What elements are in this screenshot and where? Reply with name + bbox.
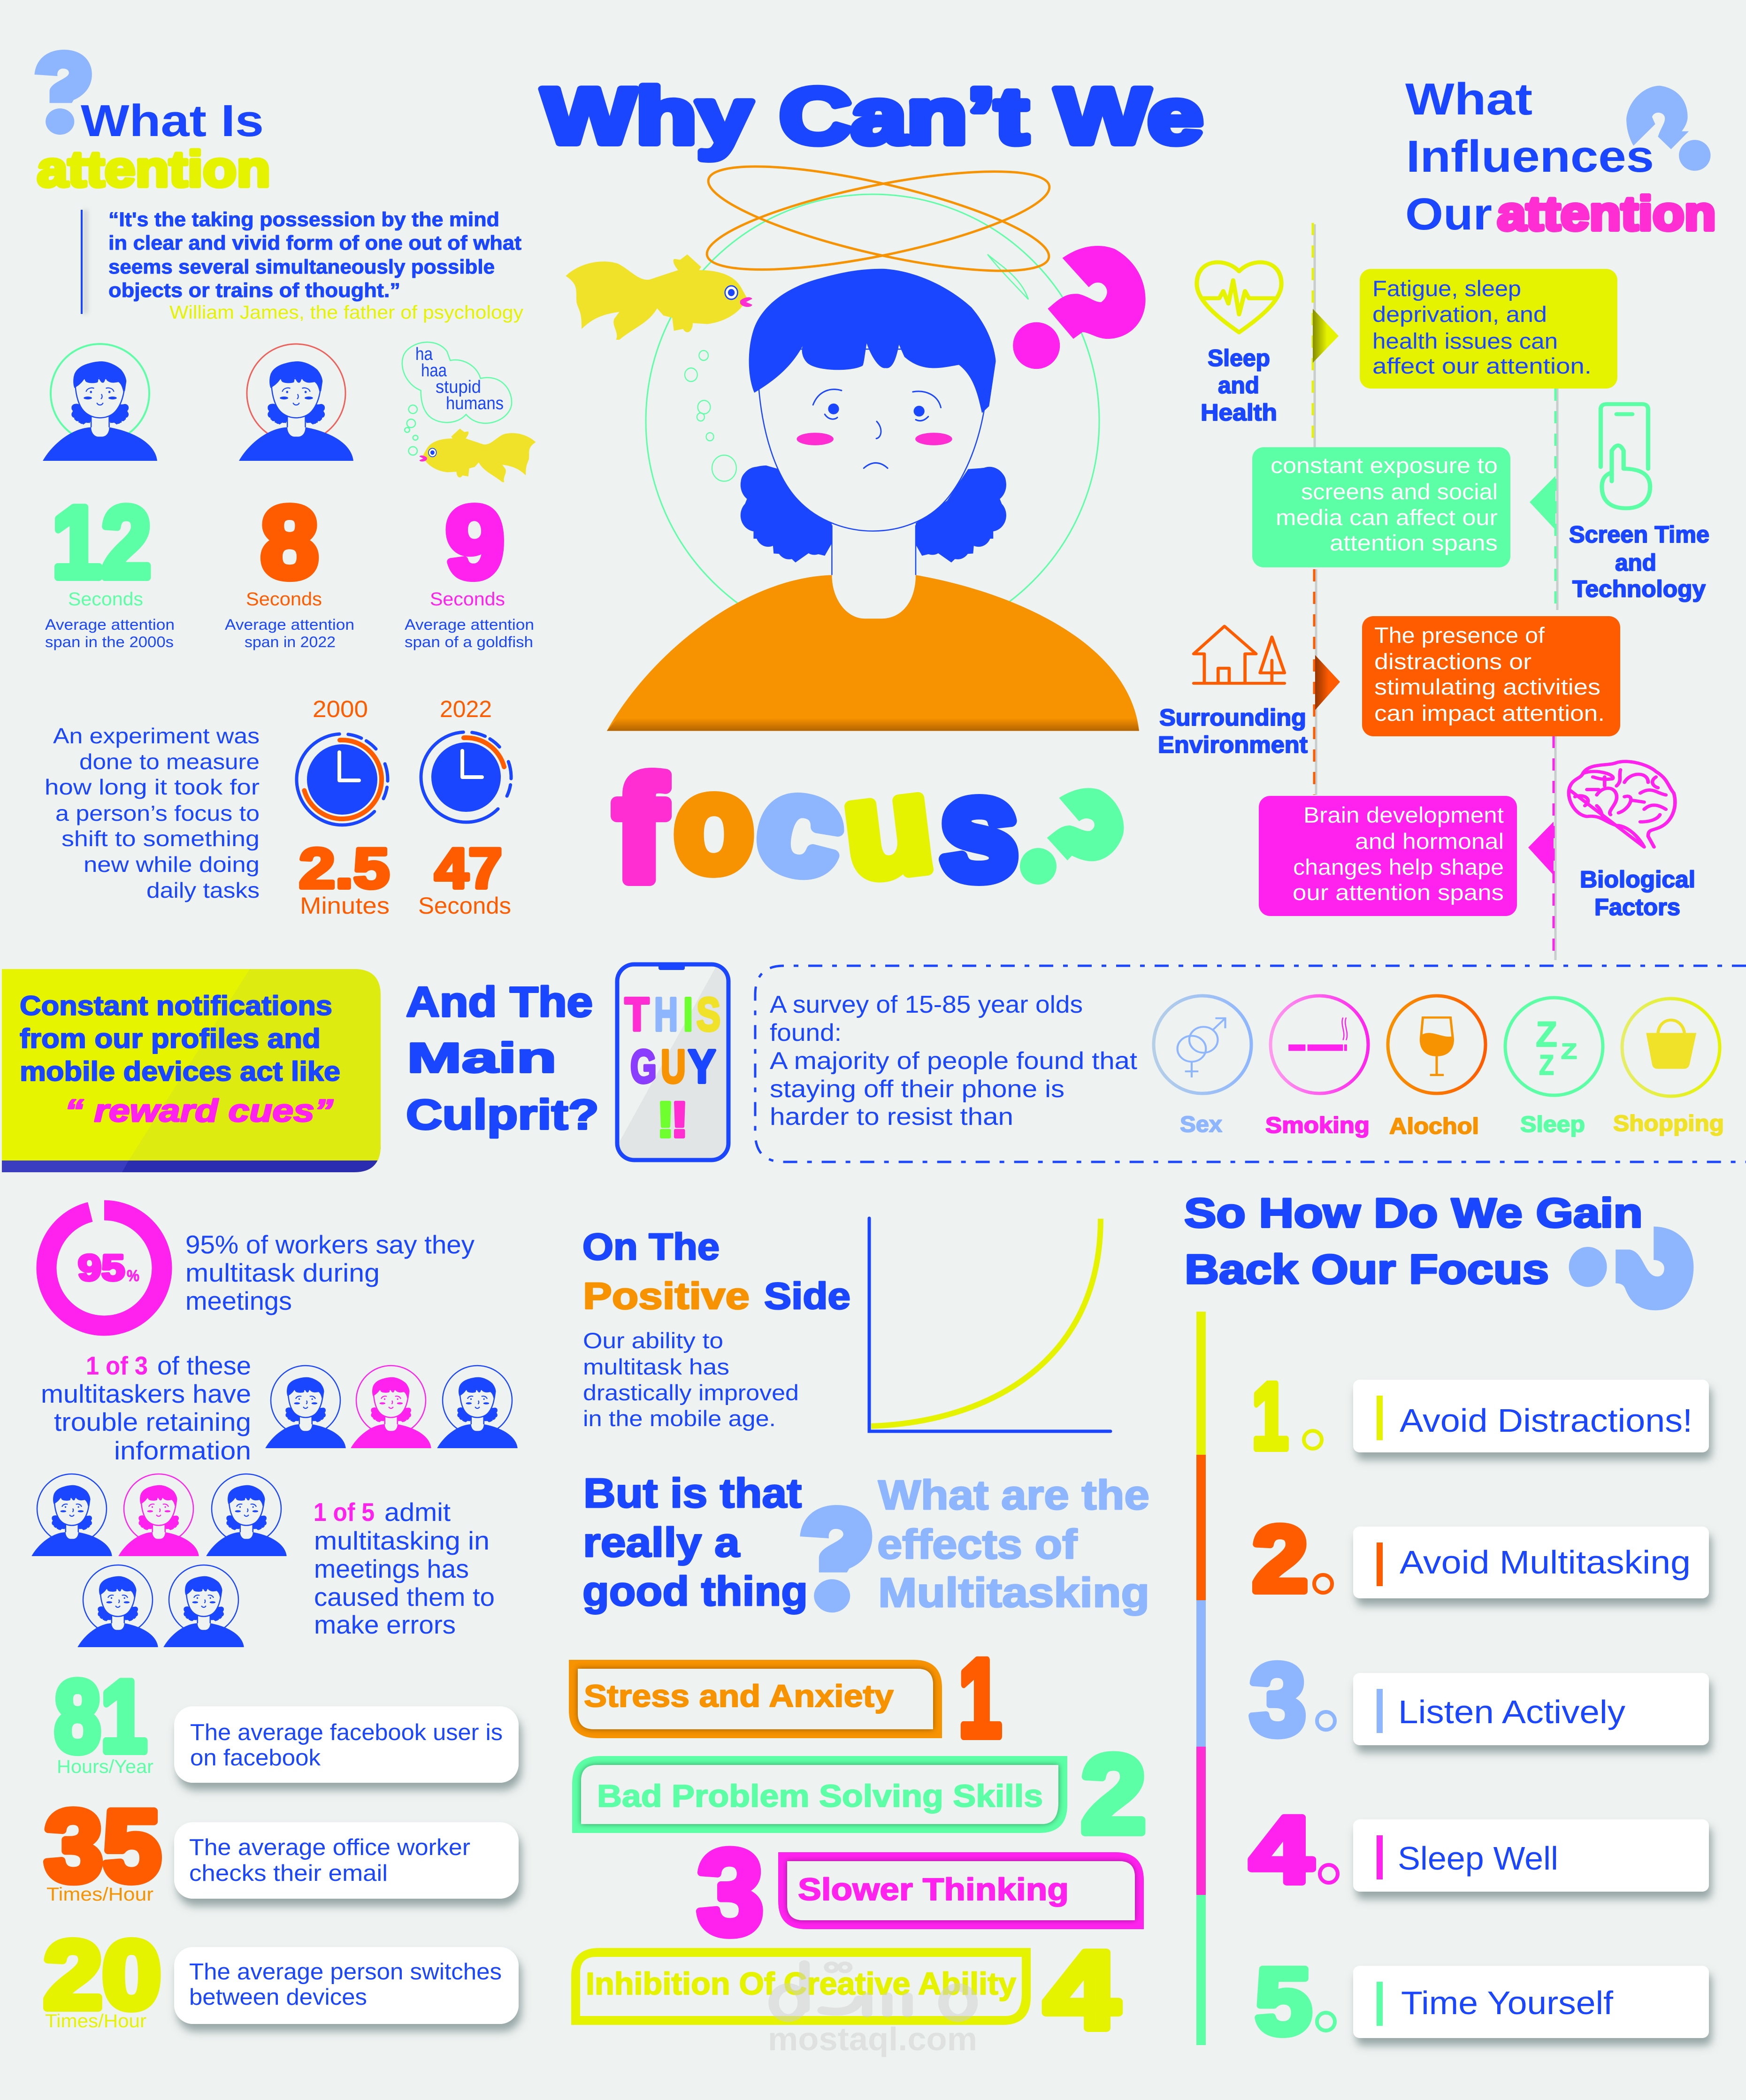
effect 4: 4 [1044, 1928, 1119, 2052]
callout: surrounding environment: distractions or [1374, 649, 1532, 674]
experiment text: new while doing [84, 852, 260, 877]
step 4: 4 [1250, 1797, 1313, 1902]
quote text [108, 208, 521, 302]
stat: 12 seconds: Average attention [45, 616, 175, 633]
label: biological factors: Factors [1594, 894, 1680, 920]
people: 1 of 5 [31, 1474, 287, 1647]
heading: but is that really a good thing: But is that [583, 1470, 802, 1516]
step 3 [1249, 1643, 1709, 1757]
callout: sleep and health: deprivation, and [1372, 302, 1547, 327]
heading: Positive [583, 1275, 750, 1317]
goldfish thought bubble: haa [421, 361, 447, 381]
stat: 2.5 minutes: 2.5 [299, 836, 390, 900]
heading: Our [1405, 189, 1492, 239]
text: drastically improved [583, 1380, 799, 1405]
icon: smoking [1265, 996, 1370, 1138]
stat: 12 seconds [45, 485, 175, 650]
this [625, 988, 720, 1041]
heading: focus [614, 742, 1124, 911]
callout: sleep and health [1313, 269, 1617, 389]
label: sleep and health: Sleep [1208, 345, 1270, 371]
text: 1 of 5 [314, 1497, 495, 1639]
icon: heart [1197, 262, 1281, 332]
experiment text: a person’s focus to [55, 801, 260, 825]
quote text: objects or trains of thought.” [108, 279, 400, 302]
quote text: in clear and vivid form of one out of what [108, 232, 521, 254]
icon: magenta question mark [1013, 246, 1146, 369]
heading: and the main culprit: Main [407, 1035, 557, 1082]
icon: phone touch [1600, 404, 1650, 508]
donut: 95 percent: % [127, 1267, 139, 1285]
donut: 95 percent: 95 [78, 1247, 125, 1288]
stat: 81 hours per year [54, 1659, 519, 1783]
stat: 20 times per hour: The average person switches [189, 1959, 502, 1985]
label: surrounding environment: Surrounding [1159, 704, 1306, 731]
this: S [697, 988, 720, 1041]
effect 2: Bad Problem Solving Skills [597, 1779, 1043, 1814]
label: screen time and technology [1569, 521, 1709, 602]
effect 4 [571, 1928, 1119, 2052]
callout: biological factors: Brain development [1303, 802, 1504, 827]
callout: biological factors: our attention spans [1293, 880, 1504, 905]
effect 4: Inhibition Of Creative Ability [586, 1966, 1016, 2001]
icon: goldfish small [420, 428, 536, 482]
step 5: 5 [1255, 1948, 1312, 2054]
heading: focus: u [836, 746, 940, 908]
icon: question mark [800, 1505, 872, 1612]
icon: smoking: Smoking [1265, 1113, 1370, 1138]
icon: sleep: Z [1539, 1049, 1554, 1081]
panel: notifications callout: from our profiles and [20, 1023, 321, 1054]
person: 2000s [43, 344, 157, 461]
watermark text: mostaql.com [768, 2021, 977, 2057]
face details [796, 389, 952, 468]
heading: effects of multitasking: Multitasking [878, 1569, 1149, 1616]
panel: notifications callout: “ reward cues” [65, 1093, 333, 1129]
heading: and the main culprit: Culprit? [406, 1092, 599, 1138]
experiment text: how long it took for [45, 775, 260, 799]
stat: 2.5 minutes [299, 836, 390, 919]
heading: and the main culprit [406, 979, 599, 1138]
label: sleep and health: and [1218, 372, 1259, 398]
step 3: 3 [1249, 1643, 1306, 1757]
year labels: 2000 [313, 696, 368, 722]
icon: alcohol [1388, 996, 1486, 1139]
panel: usage stats [44, 1659, 519, 2031]
callout: surrounding environment: The presence of [1374, 623, 1545, 648]
donut: 95 percent [46, 1210, 162, 1326]
icon: sleep: Z [1536, 1015, 1557, 1054]
stat: 12 seconds: Seconds [68, 589, 143, 610]
heading: Back Our Focus [1185, 1246, 1549, 1292]
panel: what is attention [34, 50, 523, 323]
text: 95 percent: meetings [185, 1286, 292, 1315]
icon: rotated question mark [1569, 1227, 1693, 1310]
person: 2022 [239, 344, 353, 461]
panel: effects list [569, 1636, 1146, 2052]
icon: sleep: Z [1561, 1039, 1577, 1063]
step 2 [1252, 1507, 1709, 1611]
text: 1 of 5: meetings has [314, 1554, 469, 1583]
bubbles [685, 351, 736, 481]
heading: What [1405, 74, 1532, 124]
step 1: Avoid Distractions! [1400, 1402, 1692, 1439]
orbit rings [700, 145, 1057, 292]
stat: 2.5 minutes: Minutes [300, 893, 390, 919]
text: 1 of 5: caused them to [314, 1582, 495, 1611]
stat: 20 times per hour: 20 [44, 1921, 161, 2029]
heading: Side [764, 1275, 850, 1317]
label: screen time and technology: and [1615, 550, 1656, 576]
step 2: Avoid Multitasking [1400, 1544, 1691, 1581]
text: 95 percent [185, 1230, 475, 1315]
experiment text: done to measure [79, 749, 260, 774]
year labels [313, 696, 492, 722]
callout: surrounding environment: can impact attention. [1374, 701, 1605, 725]
label: biological factors: Biological [1580, 866, 1695, 893]
icon: shopping bag: Shopping [1613, 1111, 1724, 1136]
stat: 35 times per hour: 35 [45, 1789, 161, 1902]
callout: sleep and health: Fatigue, sleep [1372, 276, 1521, 301]
step 5 [1255, 1948, 1709, 2054]
survey text: A majority of people found that [770, 1047, 1138, 1075]
text: 1 of 5: make errors [314, 1610, 456, 1639]
stat: 20 times per hour [44, 1921, 519, 2031]
text: 1 of 3: trouble retaining [54, 1407, 251, 1436]
text: 1 of 5: 1 of 5 [314, 1497, 375, 1527]
guy: G [630, 1040, 657, 1093]
stat: 47 seconds [418, 836, 511, 919]
label: screen time and technology: Technology [1572, 576, 1706, 602]
text: 1 of 3: 1 of 3 [86, 1351, 148, 1380]
stat: 9 seconds: span of a goldfish [405, 634, 533, 650]
year labels: 2022 [440, 696, 492, 722]
panel: survey [755, 966, 1746, 1162]
icon: mint dot and question mark [1020, 788, 1124, 885]
stat: 35 times per hour [45, 1789, 519, 1905]
heading: So How Do We Gain [1184, 1190, 1643, 1236]
text [583, 1328, 799, 1431]
callout: sleep and health: health issues can [1372, 328, 1558, 353]
callout: screen time: media can affect our [1276, 505, 1498, 530]
panel: notifications callout: Constant notifications [20, 991, 332, 1021]
icon: shopping bag [1613, 999, 1724, 1136]
goldfish thought bubble [402, 342, 512, 455]
exclamation marks: ! [670, 1091, 689, 1148]
panel: experiment text and clocks [45, 696, 517, 919]
icon: phone this guy [617, 963, 728, 1160]
title: Why Can’t We [542, 72, 1203, 160]
callout: sleep and health: affect our attention. [1372, 353, 1592, 378]
guy: Y [688, 1040, 716, 1093]
step 4: Sleep Well [1398, 1840, 1558, 1877]
heading: focus: s [940, 747, 1018, 909]
text: 95 percent: multitask during [185, 1258, 380, 1287]
heading: but is that really a good thing: really a [583, 1519, 740, 1565]
this: T [625, 988, 649, 1041]
chart: growth curve [869, 1218, 1110, 1431]
text: 1 of 3: information [114, 1436, 251, 1465]
step 5: Time Yourself [1401, 1985, 1614, 2021]
stat: 9 seconds [405, 485, 534, 650]
text: in the mobile age. [583, 1406, 776, 1431]
step 1: 1 [1252, 1363, 1288, 1469]
heading: but is that really a good thing: good thing [582, 1568, 808, 1614]
goldfish thought bubble: humans [446, 394, 504, 413]
icon: sleep: Sleep [1520, 1112, 1585, 1137]
heading: effects of multitasking: What are the [878, 1472, 1149, 1518]
callout: screen time: attention spans [1330, 530, 1498, 555]
woman figure [566, 246, 1146, 731]
step 1 [1252, 1363, 1709, 1469]
heading: but is that really a good thing [582, 1470, 808, 1614]
heading: focus: f [614, 748, 666, 911]
stat: 8 seconds: Seconds [246, 589, 322, 610]
text: 1 of 3 [41, 1351, 251, 1465]
icon: clock 2000 [291, 728, 394, 831]
callout: surrounding environment [1315, 616, 1620, 736]
panel: what influences our attention [1158, 74, 1716, 960]
bowl glint [988, 254, 1028, 299]
effect 3 [697, 1825, 1144, 1960]
stat: 8 seconds: 8 [261, 485, 318, 599]
this: H [654, 988, 678, 1041]
colour timeline bar [1196, 1312, 1206, 2045]
heading: attention [1497, 187, 1716, 240]
fishbowl [646, 194, 1099, 648]
stat: 8 seconds [225, 485, 354, 650]
experiment text: shift to something [61, 826, 260, 851]
callout: biological factors [1259, 796, 1554, 916]
heading [1405, 74, 1716, 240]
quote rule [81, 210, 87, 314]
label: surrounding environment [1158, 704, 1308, 758]
stat: 47 seconds: 47 [435, 836, 502, 900]
effect 2: 2 [1081, 1732, 1146, 1856]
text: 95 percent: 95% of workers say they [185, 1230, 475, 1259]
survey text: A survey of 15-85 year olds [770, 991, 1083, 1018]
stat: 9 seconds: Average attention [405, 616, 534, 633]
icon: goldfish large [566, 254, 752, 340]
quote text: seems several simultaneously possible [108, 256, 495, 278]
quote text: “It's the taking possession by the mind [108, 208, 499, 231]
experiment text: daily tasks [146, 878, 260, 902]
guy [630, 1040, 716, 1093]
exclamation marks: ! [656, 1091, 675, 1148]
callout: biological factors: changes help shape [1293, 855, 1504, 879]
quote attribution: William James, the father of psychology [169, 302, 523, 323]
effect 1 [569, 1636, 1002, 1760]
heading: effects of multitasking [877, 1472, 1149, 1616]
icon: sex: Sex [1180, 1112, 1222, 1137]
stat: 20 times per hour: Times/Hour [45, 2011, 146, 2031]
heading: Influences [1406, 131, 1654, 182]
text: 1 of 3: multitaskers have [41, 1379, 251, 1408]
icon: clock 2022 [415, 726, 517, 828]
heading: On The [582, 1226, 720, 1268]
heading: focus: o [674, 748, 753, 900]
panel: notifications callout [0, 969, 385, 1172]
text: Our ability to [583, 1328, 723, 1353]
stat: 9 seconds: Seconds [430, 589, 505, 610]
goldfish thought bubble: stupid [436, 377, 481, 397]
guy: U [661, 1040, 686, 1093]
label: screen time and technology: Screen Time [1569, 521, 1709, 548]
effect 1: 1 [958, 1636, 1002, 1760]
stat: 12 seconds: span in the 2000s [45, 634, 174, 650]
survey text: staying off their phone is [770, 1076, 1064, 1103]
experiment text: An experiment was [53, 724, 260, 748]
this: I [683, 988, 693, 1041]
icon: brain [1569, 762, 1675, 847]
stat: 20 times per hour: between devices [189, 1985, 367, 2010]
heading: attention: attention [37, 141, 270, 197]
callout: screen time: constant exposure to [1271, 453, 1498, 478]
experiment text [45, 724, 260, 902]
effect 3: Slower Thinking [798, 1872, 1069, 1907]
heading: effects of multitasking: effects of [877, 1521, 1078, 1567]
icon: alcohol: Alochol [1389, 1114, 1479, 1139]
panel: multitasking stats [31, 1210, 518, 1647]
label: sleep and health [1201, 345, 1277, 426]
text: multitask has [583, 1354, 729, 1379]
callout: screen time [1252, 447, 1555, 567]
step 3: Listen Actively [1398, 1694, 1625, 1730]
watermark logo [774, 1964, 973, 2018]
panel: gain back focus [1184, 1190, 1709, 2054]
goldfish thought bubble: ha [415, 344, 433, 364]
icon: question mark [1626, 86, 1710, 171]
step 4 [1250, 1797, 1709, 1902]
survey text [770, 991, 1138, 1130]
text: 1 of 5: admit [384, 1497, 451, 1527]
heading: what is: What Is [81, 96, 264, 146]
effect 3: 3 [697, 1825, 764, 1960]
stat: 81 hours per year: The average facebook user is [190, 1720, 503, 1745]
stat: 81 hours per year: Hours/Year [57, 1756, 153, 1777]
effect 2 [572, 1732, 1146, 1856]
text: 1 of 3: of these [157, 1351, 251, 1380]
stat: 35 times per hour: Times/Hour [46, 1884, 153, 1905]
stat: 35 times per hour: The average office worker [189, 1835, 470, 1860]
connector: dashed timeline [1313, 223, 1557, 960]
stat: 12 seconds: 12 [52, 485, 151, 599]
exclamation marks [656, 1091, 689, 1148]
panel: notifications callout: mobile devices act like [20, 1056, 340, 1087]
effect 1: Stress and Anxiety [584, 1679, 894, 1714]
people: 1 of 3 [265, 1366, 518, 1448]
illustration: confused woman with fishbowl [566, 145, 1146, 731]
heading: focus: c [745, 742, 858, 908]
label: biological factors [1580, 866, 1695, 920]
panel: positive side [582, 1218, 1110, 1431]
stat: 81 hours per year: 81 [54, 1659, 147, 1773]
watermark [768, 1964, 977, 2057]
stat: 81 hours per year: on facebook [190, 1745, 321, 1771]
survey text: harder to resist than [770, 1103, 1013, 1130]
heading: and the main culprit: And The [406, 979, 593, 1026]
step 2: 2 [1252, 1507, 1308, 1611]
text: 1 of 5: multitasking in [314, 1526, 490, 1555]
stat: 9 seconds: 9 [446, 485, 504, 599]
icon: sex [1154, 996, 1251, 1137]
heading [582, 1226, 850, 1317]
stat: 47 seconds: Seconds [418, 893, 511, 919]
callout: surrounding environment: stimulating activities [1374, 674, 1600, 699]
stat: 8 seconds: Average attention [225, 616, 354, 633]
icon: sleep [1505, 998, 1603, 1137]
icon: house and tree [1194, 626, 1285, 683]
icon: question mark [34, 50, 92, 135]
callout: screen time: screens and social [1301, 479, 1498, 504]
stat: 35 times per hour: checks their email [189, 1861, 388, 1886]
label: surrounding environment: Environment [1158, 732, 1308, 758]
callout: biological factors: and hormonal [1355, 829, 1504, 854]
heading [1184, 1190, 1643, 1292]
label: sleep and health: Health [1201, 399, 1277, 426]
panel: attention span comparison [43, 342, 536, 650]
stat: 8 seconds: span in 2022 [245, 634, 336, 650]
survey text: found: [770, 1019, 842, 1046]
